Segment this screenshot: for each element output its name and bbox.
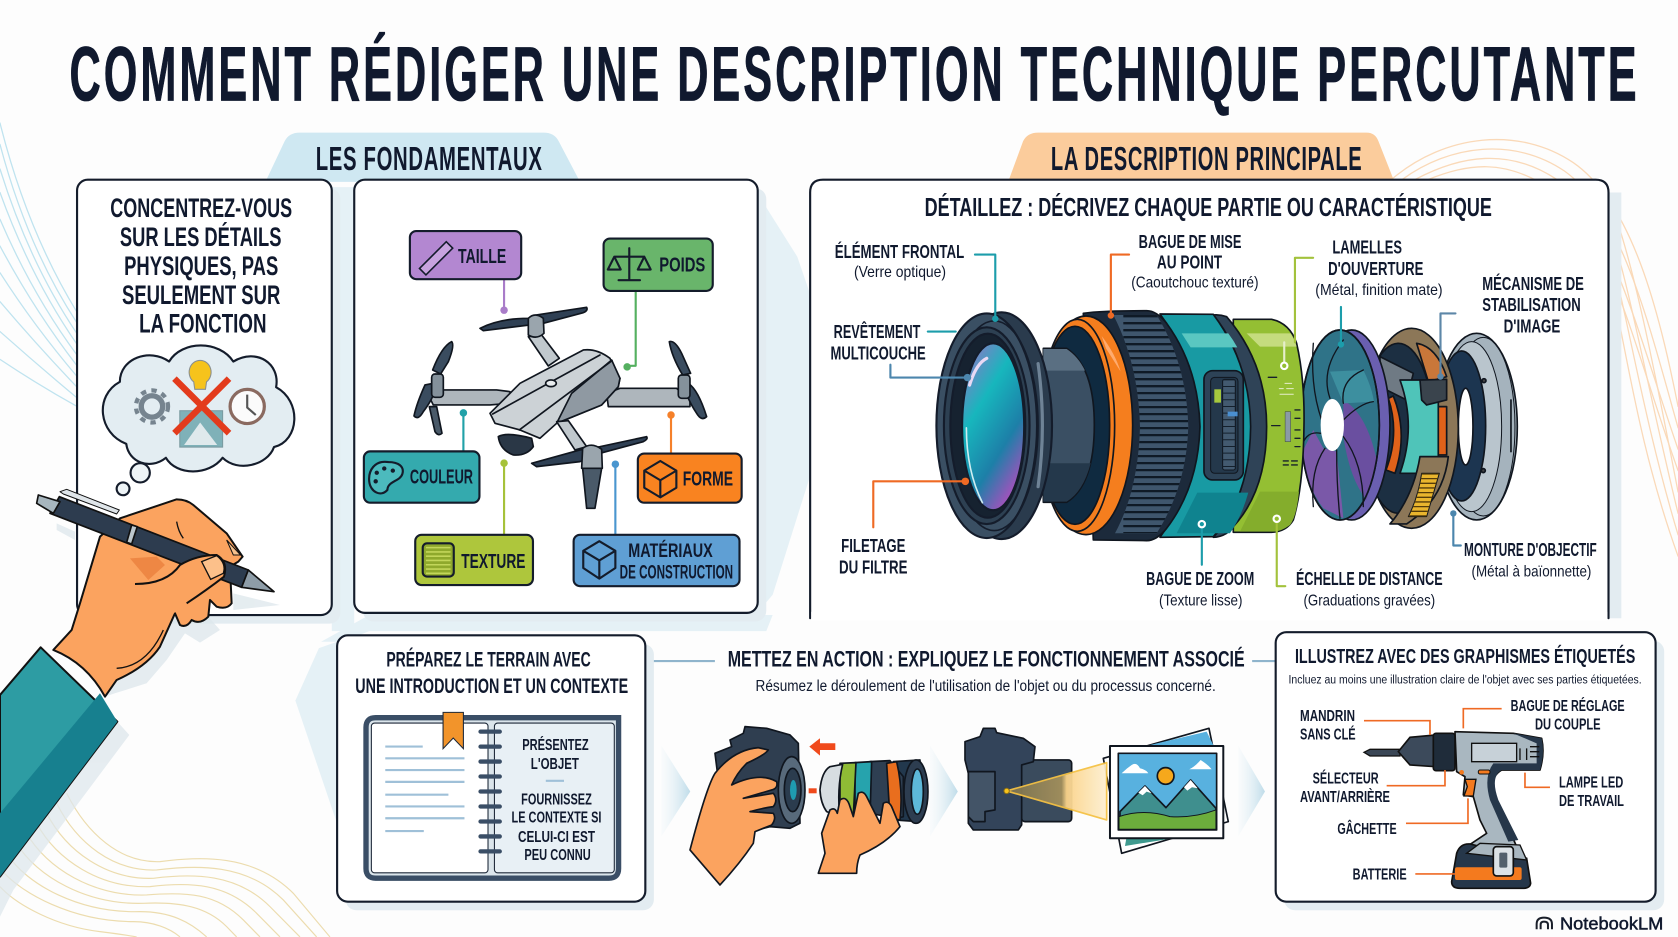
lens front	[936, 312, 1052, 539]
panel: lens exploded view	[810, 180, 1621, 620]
label: échelle de distance	[1296, 568, 1443, 609]
tag: couleur: COULEUR	[410, 466, 473, 488]
panel: illustrez: Incluez au moins une illustration claire de l'objet avec ses parties étiquetées.	[1289, 673, 1642, 686]
thumb	[135, 555, 225, 630]
drill labels: SANS CLÉ	[1300, 726, 1356, 743]
label: filetage du filtre	[839, 536, 908, 577]
label: lamelles d'ouverture	[1315, 237, 1443, 299]
drill labels: DU COUPLE	[1535, 716, 1601, 733]
label: échelle de distance: (Graduations gravées)	[1304, 591, 1435, 609]
red dash	[809, 788, 817, 793]
label: revêtement multicouche	[830, 321, 926, 363]
logo: notebooklm: NotebookLM	[1560, 913, 1663, 933]
label: lamelles d'ouverture: LAMELLES	[1332, 237, 1402, 257]
label: bague de mise au point: AU POINT	[1157, 252, 1222, 272]
label: monture d'objectif	[1464, 540, 1597, 581]
drill bit	[1364, 749, 1400, 756]
arrow: chevron 1	[661, 746, 690, 836]
orange wave lines	[1391, 140, 1678, 556]
tag: forme: FORME	[683, 469, 733, 491]
tag: forme	[638, 454, 742, 503]
tag: poids: POIDS	[659, 255, 705, 277]
label: mécanisme de stabilisation: D'IMAGE	[1504, 317, 1560, 337]
beige wave lines	[0, 793, 330, 937]
tag: taille: TAILLE	[458, 246, 506, 268]
label: élément frontal: ÉLÉMENT FRONTAL	[835, 241, 964, 262]
icon: drone	[414, 307, 707, 508]
right hand	[818, 792, 900, 873]
label: mécanisme de stabilisation: MÉCANISME DE	[1482, 273, 1584, 294]
tag: texture	[415, 535, 533, 585]
icon: spiral notebook: FOURNISSEZ	[521, 791, 592, 808]
detached lens	[820, 760, 928, 823]
trigger	[1464, 779, 1476, 796]
label: lamelles d'ouverture: (Métal, finition mate)	[1315, 281, 1443, 299]
illustration: attaching the lens	[690, 727, 928, 885]
drill labels: GÂCHETTE	[1337, 820, 1397, 838]
label: monture d'objectif: (Métal à baïonnette)	[1472, 563, 1591, 581]
tag: texture: TEXTURE	[461, 551, 525, 573]
lens middle: lime, teal, focus and orange rings	[1039, 311, 1304, 541]
panel: concentrez-vous: PHYSIQUES, PAS	[124, 251, 278, 281]
label: revêtement multicouche: REVÊTEMENT	[834, 321, 920, 342]
panel: concentrez-vous: LA FONCTION	[139, 309, 266, 339]
light beam	[1007, 763, 1107, 820]
camera	[965, 728, 1072, 830]
panel: concentrez-vous: SUR LES DÉTAILS	[120, 221, 281, 252]
drill labels: DE TRAVAIL	[1559, 793, 1624, 810]
drill labels: LAMPE LED	[1559, 775, 1623, 792]
illustration: labelled drill	[1300, 698, 1663, 933]
label: bague de zoom: (Texture lisse)	[1159, 591, 1243, 609]
chuck	[1398, 735, 1435, 767]
callout lines	[1364, 709, 1550, 874]
arrow: red	[809, 738, 835, 756]
label: bague de zoom: BAGUE DE ZOOM	[1146, 569, 1254, 589]
label: filetage du filtre: DU FILTRE	[839, 557, 908, 577]
tag: matériaux de construction: DE CONSTRUCTION	[620, 563, 733, 584]
icon: thought cloud	[103, 345, 294, 495]
label: lamelles d'ouverture: D'OUVERTURE	[1328, 259, 1423, 279]
left hand	[690, 748, 777, 885]
drill labels: SÉLECTEUR	[1313, 770, 1379, 787]
drill body	[1455, 732, 1543, 862]
label: bague de mise au point	[1131, 232, 1259, 292]
heading: mettez en action: METTEZ EN ACTION : EXPLIQUEZ LE FONCTIONNEMENT ASSOCIÉ	[728, 646, 1245, 671]
blue wave lines	[0, 123, 77, 406]
label: filetage du filtre: FILETAGE	[841, 536, 905, 556]
panel: illustrez	[1276, 632, 1664, 910]
connector lines	[460, 279, 675, 535]
photos	[1103, 728, 1228, 853]
label: monture d'objectif: MONTURE D'OBJECTIF	[1464, 540, 1597, 560]
panel: préparez le terrain: UNE INTRODUCTION ET UN CONTEXTE	[355, 674, 628, 698]
connector lines between bottom panels	[645, 660, 1276, 662]
pen	[37, 489, 274, 592]
label: bague de mise au point: (Caoutchouc texturé)	[1131, 274, 1259, 292]
label: élément frontal	[835, 241, 964, 281]
label: mécanisme de stabilisation: STABILISATION	[1482, 295, 1581, 315]
tab: les fondamentaux: LES FONDAMENTAUX	[316, 141, 543, 178]
label: revêtement multicouche: MULTICOUCHE	[830, 343, 926, 363]
tag: matériaux de construction	[574, 535, 740, 586]
icon: spiral notebook: CELUI-CI EST	[518, 829, 595, 846]
tab: la description principale	[1008, 133, 1394, 182]
heading: mettez en action	[728, 646, 1245, 695]
panel: drone attributes	[354, 180, 766, 621]
illustration: lens	[936, 311, 1517, 541]
drill labels: MANDRIN	[1300, 708, 1355, 725]
camera body	[715, 727, 805, 830]
tag: poids	[604, 239, 713, 291]
panel: concentrez-vous: CONCENTREZ-VOUS	[110, 193, 292, 223]
label: échelle de distance: ÉCHELLE DE DISTANCE	[1296, 568, 1443, 589]
sleeve	[0, 647, 117, 877]
tag: couleur	[364, 451, 479, 503]
arrow: chevron 3	[1238, 746, 1265, 836]
callout lines	[873, 255, 1461, 586]
battery	[1452, 844, 1531, 888]
drill labels	[1300, 698, 1625, 883]
drill labels: AVANT/ARRIÈRE	[1300, 789, 1390, 806]
label: bague de mise au point: BAGUE DE MISE	[1139, 232, 1241, 252]
tab: la description principale: LA DESCRIPTION PRINCIPALE	[1051, 141, 1362, 178]
icon: spiral notebook: LE CONTEXTE SI	[512, 810, 601, 827]
drill labels: BAGUE DE RÉGLAGE	[1511, 698, 1625, 715]
hand	[53, 499, 243, 697]
label: bague de zoom	[1146, 569, 1254, 609]
lens rear: mount, stabilizer, aperture	[1301, 328, 1517, 528]
framed picture	[1110, 746, 1223, 838]
icon: spiral notebook: L'OBJET	[531, 756, 579, 773]
icon: spiral notebook: PEU CONNU	[524, 847, 591, 864]
panel: préparez le terrain: PRÉPAREZ LE TERRAIN AVEC	[386, 646, 591, 671]
panel: préparez le terrain	[337, 635, 654, 910]
tab: les fondamentaux	[265, 133, 580, 182]
illustration: hand writing with pen	[0, 489, 280, 917]
label: élément frontal: (Verre optique)	[854, 263, 946, 281]
panel: concentrez-vous	[77, 180, 340, 624]
icon: spiral notebook: PRÉSENTEZ	[522, 737, 589, 754]
heading: mettez en action: Résumez le déroulement de l'utilisation de l'objet ou du processus concerné.	[756, 678, 1216, 695]
drill labels: BATTERIE	[1353, 866, 1407, 883]
label: mécanisme de stabilisation	[1482, 273, 1584, 337]
icon: spiral notebook	[366, 712, 619, 878]
panel: concentrez-vous: SEULEMENT SUR	[122, 280, 280, 310]
decorative pale shapes	[295, 187, 810, 824]
tag: matériaux de construction: MATÉRIAUX	[628, 540, 713, 562]
tag: taille	[410, 231, 521, 279]
illustration: camera shooting photo	[965, 728, 1228, 853]
arrow: chevron 2	[930, 746, 958, 836]
